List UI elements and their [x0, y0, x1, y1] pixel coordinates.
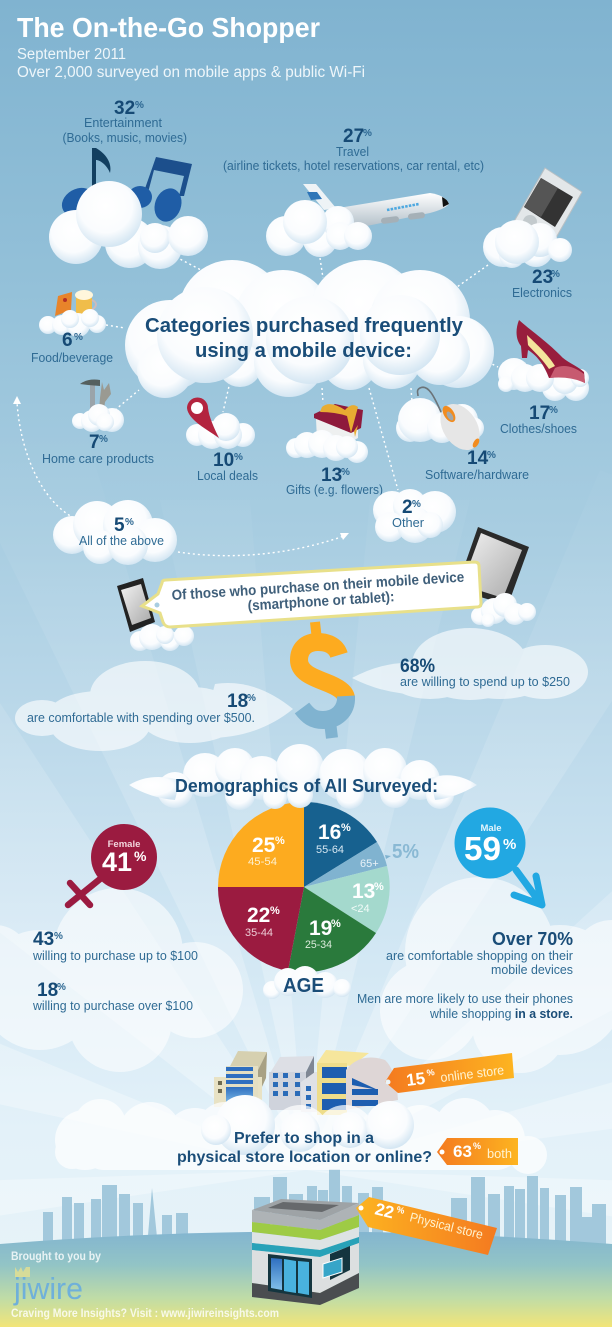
item: food and beverage: 6: [62, 330, 73, 351]
callout: (smartphone or tablet):: [247, 589, 395, 614]
tag: 15 percent online store: 15: [405, 1069, 426, 1090]
item: entertainment: 32: [114, 98, 135, 119]
pie chart: age: <24: [351, 903, 370, 915]
icon: female symbol: %: [134, 848, 147, 864]
heading: [177, 1130, 432, 1166]
text: 18 percent: are comfortable with spending over $500.: [27, 710, 255, 725]
tag: 15 percent online store: [385, 1053, 514, 1093]
item: electronics: %: [551, 269, 560, 280]
item: software and hardware: Software/hardware: [425, 467, 529, 482]
icon: jiwire crown: [15, 1267, 30, 1277]
icon: female symbol: Female: [108, 839, 140, 850]
item: gifts: %: [341, 467, 350, 478]
arrowheads for dotted lines: [13, 396, 349, 540]
icon: male symbol: [454, 808, 542, 905]
cloud under tablet: [471, 593, 536, 627]
item: all of the above: %: [125, 517, 134, 528]
cloud behind heading: [129, 744, 477, 810]
heading: [145, 314, 464, 362]
item: clothes and shoes: %: [549, 405, 558, 416]
icon: tablet: [456, 527, 529, 605]
footer: Brought to you by: [11, 1251, 102, 1263]
pie chart: age: 22: [247, 904, 270, 927]
heading: Categories purchased frequently: [145, 314, 464, 337]
pie chart: age: 35-44: [245, 927, 273, 939]
item: software and hardware: 14: [467, 448, 489, 469]
icon: airplane: [303, 184, 449, 229]
item: home care: Home care products: [42, 451, 154, 466]
item: other: [373, 489, 456, 543]
tag: 22 percent physical store: %: [396, 1204, 406, 1216]
icon: pizza and drink: [55, 290, 96, 316]
item: electronics: 23: [532, 267, 553, 288]
tag: 63 percent both: both: [487, 1146, 512, 1161]
text: female stats: willing to purchase over $100: [32, 998, 193, 1013]
heading: using a mobile device:: [195, 339, 412, 362]
text: female stats: 43: [33, 929, 54, 950]
icon: map pin: [187, 398, 219, 438]
icon: red high heel shoe: [517, 320, 585, 383]
cloud: [39, 309, 106, 337]
pie chart: age: 25: [252, 834, 276, 857]
item: all of the above: [53, 500, 177, 565]
icon: office buildings: [214, 1050, 398, 1115]
logo: jiwire: jiwire: [13, 1271, 83, 1306]
heading: physical store location or online?: [177, 1149, 432, 1166]
item: clothes and shoes: Clothes/shoes: [500, 421, 577, 436]
icon: female symbol: [68, 824, 157, 905]
tag: 15 percent online store: online store: [440, 1062, 505, 1085]
pie chart: age: 16: [318, 821, 341, 844]
tag: 63 percent both: [437, 1138, 518, 1165]
pie chart: age: 45-54: [248, 856, 277, 868]
pie chart: age: [218, 802, 419, 972]
icon: female symbol: 41: [102, 847, 132, 877]
ground hill: [0, 1232, 612, 1327]
text: 18 percent: 18: [227, 691, 248, 712]
item: local deals: %: [234, 452, 243, 463]
icon: male symbol: Male: [480, 823, 502, 834]
cloud: 18 percent: [15, 661, 293, 751]
panel: main heading cloud: [125, 260, 494, 398]
tag: 63 percent both: 63: [453, 1142, 472, 1161]
item: other: 2: [402, 497, 413, 518]
cloud: age label: [263, 966, 351, 999]
icon: music note head: [150, 185, 186, 225]
item: home care: 7: [89, 432, 100, 453]
icon: male symbol: %: [503, 836, 516, 853]
text: male stats: while shopping in a store.: [429, 1006, 573, 1021]
panel: demographics: [0, 744, 612, 1073]
cloud: [186, 413, 255, 449]
text: 18 percent: [27, 691, 256, 725]
pie chart: age: %: [374, 881, 384, 893]
item: clothes and shoes: [498, 320, 589, 436]
footer: [11, 1251, 279, 1320]
text: male stats: Men are more likely to use their phones: [357, 991, 573, 1006]
heading: Demographics of All Surveyed:: [175, 775, 438, 796]
icon: hammer and wrench: [80, 380, 111, 410]
icon: phone: [512, 168, 582, 250]
cloud: [55, 1098, 547, 1174]
icon: music notes: [57, 148, 192, 222]
item: entertainment: %: [135, 100, 144, 111]
icon: smartphone: [117, 578, 155, 632]
item: local deals: Local deals: [197, 468, 258, 483]
text: female stats: %: [57, 982, 66, 993]
item: entertainment: [49, 98, 208, 269]
item: travel: 27: [343, 126, 364, 147]
icon: gift box: [314, 404, 363, 445]
text: male stats: Over 70%: [492, 929, 573, 949]
item: gifts: [286, 404, 383, 497]
text: male stats: mobile devices: [491, 962, 573, 977]
text: 18 percent: %: [247, 693, 256, 704]
dotted connector lines: [17, 257, 498, 556]
cloud: [125, 260, 494, 398]
pie chart: age: 65+: [360, 858, 379, 870]
item: gifts: Gifts (e.g. flowers): [286, 482, 383, 497]
item: software and hardware: [396, 387, 529, 482]
item: travel: Travel: [336, 144, 369, 159]
text: 68 percent: 68%: [400, 656, 435, 677]
pie chart: age: 19: [309, 917, 332, 940]
pie chart: age: %: [331, 918, 341, 930]
item: electronics: [483, 168, 582, 300]
icon: dollar sign: [299, 622, 346, 738]
cloud: [72, 404, 124, 432]
text: male stats: [357, 929, 574, 1021]
item: food and beverage: %: [74, 332, 83, 343]
item: all of the above: All of the above: [79, 533, 164, 548]
item: all of the above: 5: [114, 515, 125, 536]
icon: computer mouse: [418, 387, 488, 457]
item: entertainment: Entertainment: [84, 115, 162, 130]
tag: 15 percent online store: %: [426, 1067, 435, 1078]
item: clothes and shoes: 17: [529, 403, 550, 424]
item: electronics: Electronics: [512, 285, 572, 300]
item: entertainment: (Books, music, movies): [62, 130, 187, 145]
item: local deals: 10: [213, 450, 234, 471]
item: food and beverage: [31, 290, 113, 365]
cloud: [373, 489, 456, 543]
text: male stats: are comfortable shopping on their: [386, 948, 574, 963]
item: gifts: 13: [321, 465, 342, 486]
pie chart: age: %: [341, 822, 351, 834]
cloud: 68 percent: [352, 628, 588, 700]
callout: [142, 562, 481, 627]
item: other: Other: [392, 515, 425, 530]
heading: Prefer to shop in a: [234, 1130, 374, 1147]
tag: 22 percent physical store: 22: [373, 1199, 396, 1222]
pie chart: age: %: [270, 905, 280, 917]
pie chart: age: 25-34: [305, 939, 332, 951]
title block: September 2011: [17, 46, 126, 63]
cloud under smartphone: [130, 624, 194, 651]
text: female stats: 18: [37, 980, 58, 1001]
tag: 63 percent both: %: [473, 1141, 481, 1151]
text: female stats: willing to purchase up to $100: [32, 948, 198, 963]
city skyline: [43, 1169, 606, 1247]
cloud: [53, 500, 177, 565]
clouds behind text: [0, 877, 612, 1073]
title block: The On-the-Go Shopper: [17, 12, 320, 43]
tag: 22 percent physical store: Physical store: [408, 1209, 485, 1242]
item: local deals: [186, 398, 258, 483]
cloud: [286, 430, 368, 463]
pie chart: age: 13: [352, 880, 375, 903]
tag: 22 percent physical store: [356, 1197, 497, 1255]
item: travel: [223, 126, 484, 257]
cloud: [498, 358, 589, 401]
text: 68 percent: are willing to spend up to $250: [400, 674, 570, 689]
cloud: [396, 398, 484, 443]
item: travel: (airline tickets, hotel reservations, car rental, etc): [223, 158, 484, 173]
title block: [17, 12, 365, 81]
text: female stats: %: [54, 931, 63, 942]
callout: Of those who purchase on their mobile device: [171, 570, 465, 604]
item: software and hardware: %: [487, 450, 496, 461]
item: home care: %: [99, 434, 108, 445]
pie chart: age: %: [275, 835, 285, 847]
cloud: [483, 220, 572, 268]
item: other: %: [412, 499, 421, 510]
cloud tops over buildings: [201, 1095, 414, 1155]
item: travel: %: [363, 128, 372, 139]
panel: store preference: [0, 1050, 612, 1327]
pie chart: age: 55-64: [316, 844, 344, 856]
icon: store building: [252, 1199, 359, 1305]
icon: male symbol: 59: [464, 830, 501, 867]
panel: spending: [15, 527, 588, 751]
label: age: AGE: [283, 974, 324, 997]
background sun rays: [0, 380, 612, 1260]
footer: Craving More Insights? Visit : www.jiwireinsights.com: [11, 1308, 279, 1320]
pie chart: age: 5%: [392, 841, 419, 863]
item: food and beverage: Food/beverage: [31, 350, 113, 365]
text: female stats: [32, 929, 198, 1013]
cloud: [266, 200, 372, 257]
text: 68 percent: [400, 656, 570, 689]
item: home care: [42, 380, 154, 466]
title block: Over 2,000 surveyed on mobile apps & public Wi-Fi: [17, 64, 365, 81]
cloud: [49, 181, 208, 269]
